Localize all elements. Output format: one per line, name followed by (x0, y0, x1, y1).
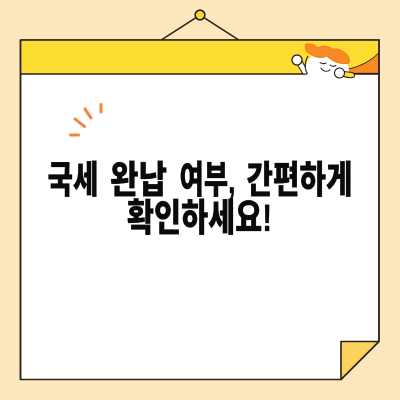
title: 간편하게 (246, 160, 352, 202)
title: 국세 (48, 160, 98, 202)
yellow header band (21, 41, 378, 74)
raised hand (292, 55, 302, 65)
title: 여부, (180, 160, 236, 202)
sparkle accent (70, 104, 101, 135)
hanger string and pin (162, 10, 238, 39)
lower hand and yellow pencil (343, 72, 355, 78)
title (48, 160, 352, 240)
orange cape (348, 53, 378, 73)
hair (305, 44, 350, 64)
character illustration (292, 44, 378, 78)
closed eyes and smile (320, 62, 336, 71)
raised arm (297, 61, 309, 74)
title: 확인하세요! (127, 198, 272, 240)
note paper (20, 40, 379, 380)
title: 완납 (110, 160, 167, 202)
face (306, 51, 349, 75)
folded corner (341, 342, 379, 380)
